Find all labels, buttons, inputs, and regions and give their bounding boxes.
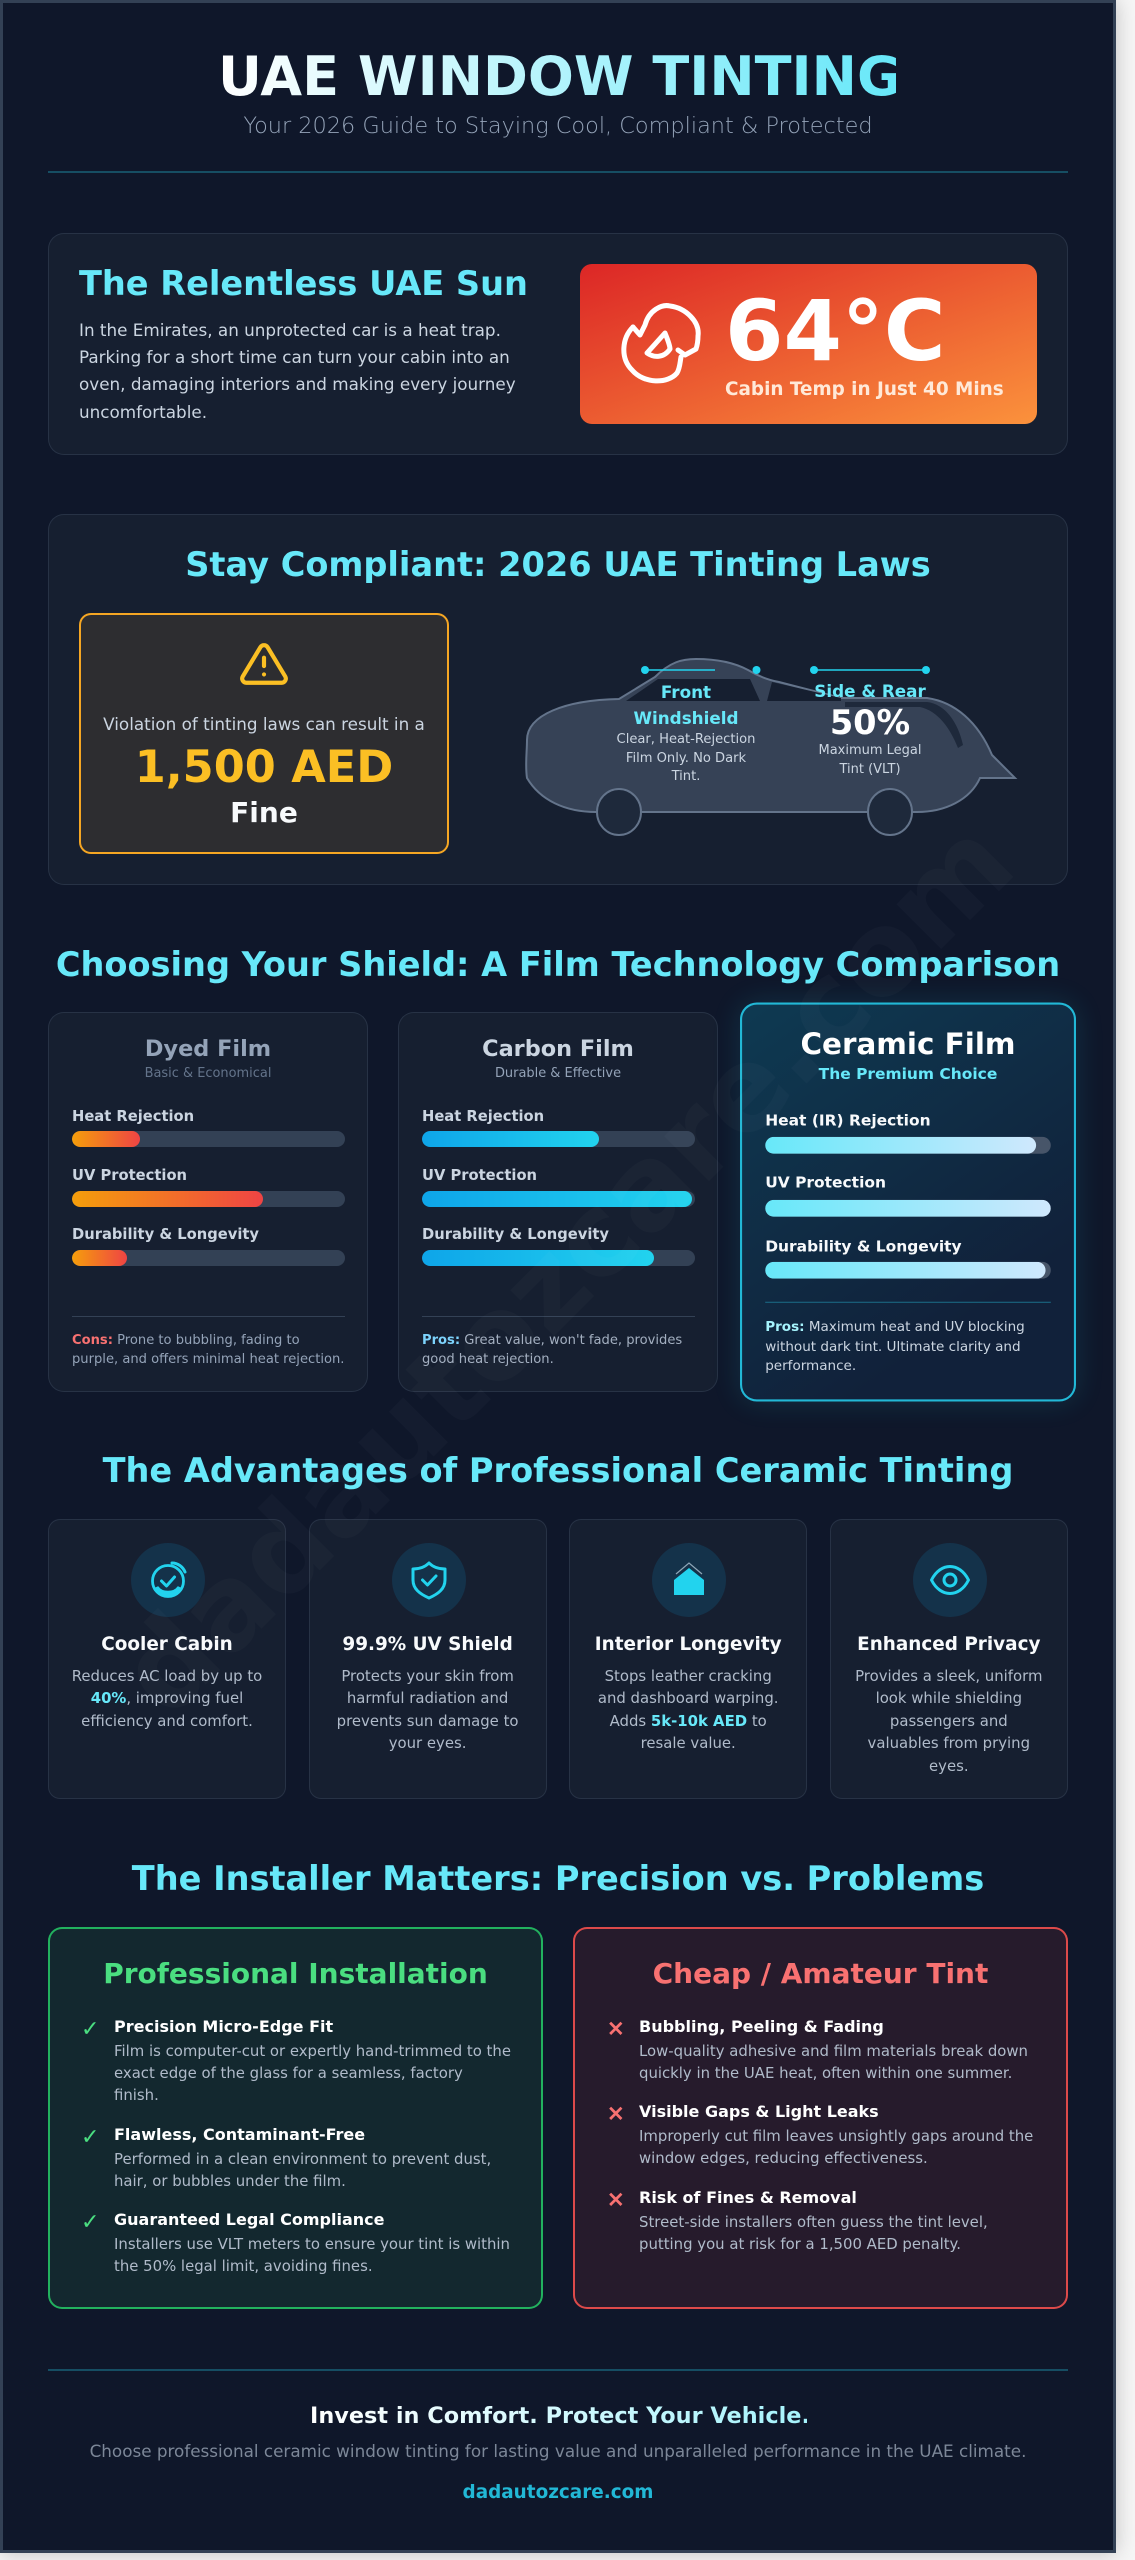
text: violation: Violation of tinting laws can result in a [103,714,425,734]
item: gaps: Visible Gaps & Light Leaks [639,2102,879,2121]
subtitle: dyed film: Basic & Economical [145,1066,271,1081]
wheels [597,789,641,835]
text: front windshield rule [617,732,755,784]
text: sun description [79,320,516,422]
icon: enhanced privacy [913,1543,987,1617]
panel: cooler cabin [48,1519,286,1799]
text: interior longevity [598,1667,779,1752]
label: front windshield: Windshield [633,708,739,728]
metric: heat rejection [765,1112,1051,1154]
text: maximum legal: Tint (VLT) [839,762,901,777]
text: maximum legal: Maximum Legal [818,743,922,758]
item: bubbling [607,2017,1028,2082]
metric: heat rejection: Heat Rejection [422,1108,544,1125]
metric: heat rejection: Heat (IR) Rejection [765,1112,931,1130]
title: dyed film: Dyed Film [145,1036,271,1062]
text: interior longevity: and dashboard warping. [598,1689,779,1707]
text: maximum legal [818,743,922,777]
text: enhanced privacy [855,1667,1042,1775]
text: uv shield: harmful radiation and [347,1689,508,1707]
item: bubbling: quickly in the UAE heat, often within one summer. [639,2064,1012,2082]
text: interior longevity: Stops leather cracking [605,1667,772,1685]
panel: cheap tint [573,1927,1068,2309]
metric: uv protection: UV Protection [765,1174,886,1192]
item: fines: ✕ [607,2188,625,2212]
subtitle: premium choice: The Premium Choice [819,1066,997,1083]
heading: installer: The Installer Matters: Precision vs. Problems [132,1858,984,1898]
label: cabin temp: Cabin Temp in Just 40 Mins [725,379,1004,400]
text: uv shield: prevents sun damage to [337,1712,518,1730]
title: interior longevity: Interior Longevity [595,1634,782,1655]
label: front windshield: Front [661,682,711,702]
text: sun description: In the Emirates, an unprotected car is a heat trap. [79,320,501,340]
car body [526,659,1015,812]
text: sun description: Parking for a short time can turn your cabin into an [79,347,510,367]
text: enhanced privacy: Provides a sleek, uniform [855,1667,1042,1685]
heading: cheap: Cheap / Amateur Tint [653,1957,988,1990]
text: cons: Cons: Prone to bubbling, fading to [72,1333,300,1348]
label: side and rear: Side & Rear [814,681,926,701]
title: ceramic film: Ceramic Film [800,1027,1016,1061]
panel: uv shield [309,1519,547,1799]
item: gaps: window edges, reducing effectiveness. [639,2149,928,2167]
title: enhanced privacy: Enhanced Privacy [857,1634,1040,1655]
text: enhanced privacy: valuables from prying [868,1734,1030,1752]
value: 50 percent: 50% [830,703,910,742]
item: contaminant-free: ✓ [81,2125,99,2150]
metric: uv protection [765,1174,1051,1217]
metric: durability: Durability & Longevity [72,1226,259,1243]
panel: enhanced privacy [830,1519,1068,1799]
footer headline: Invest in Comfort. Protect Your Vehicle. [310,2403,810,2429]
heading: advantages: The Advantages of Professional Ceramic Tinting [103,1450,1013,1490]
text: interior longevity: Adds 5k-10k AED to [610,1712,767,1730]
metric: heat rejection [72,1108,345,1147]
metric: uv protection: UV Protection [72,1167,187,1184]
panel: carbon film [398,1012,718,1392]
value: 64 degrees: 64°C [725,282,946,380]
text: pros: Pros: Maximum heat and UV blocking [765,1320,1025,1335]
text: pros: good heat rejection. [422,1352,554,1367]
item: legal compliance: Guaranteed Legal Compliance [114,2210,384,2229]
item: legal compliance: Installers use VLT meters to ensure your tint is within [114,2235,510,2253]
item: micro-edge fit: ✓ [81,2017,99,2042]
watermark: dadautozcare.com [93,795,1040,1742]
label: fine: Fine [230,796,298,829]
item: fines [607,2188,988,2253]
item: gaps [607,2102,1033,2167]
text: uv shield: Protects your skin from [341,1667,514,1685]
title: cooler cabin: Cooler Cabin [101,1634,233,1655]
icon: uv shield [392,1543,466,1617]
text: sun description: oven, damaging interiors and making every journey [79,374,516,394]
item: micro-edge fit: Film is computer-cut or expertly hand-trimmed to the [114,2042,511,2060]
subtitle: Your 2026 Guide to Staying Cool, Compliant & Protected [243,113,873,139]
text: cons: purple, and offers minimal heat rejection. [72,1352,344,1367]
metric: durability [422,1226,695,1266]
item: fines: Street-side installers often guess the tint level, [639,2213,988,2231]
text: cooler cabin [72,1667,262,1730]
metric: uv protection [72,1167,345,1207]
text: enhanced privacy: passengers and [890,1712,1008,1730]
text: pros: performance. [765,1359,856,1375]
title: carbon film: Carbon Film [482,1036,634,1062]
item: bubbling: Low-quality adhesive and film materials break down [639,2042,1028,2060]
icon: cooler cabin [131,1543,205,1617]
metric: durability: Durability & Longevity [765,1238,962,1256]
item: legal compliance: the 50% legal limit, avoiding fines. [114,2257,373,2275]
text: pros: Pros: Great value, won't fade, provides [422,1333,682,1348]
icon: interior longevity [652,1543,726,1617]
metric: durability [765,1238,1051,1279]
text: pros [765,1320,1025,1375]
metric: durability [72,1226,345,1266]
panel: professional installation [48,1927,543,2309]
panel: relentless sun [48,233,1068,455]
footer text: Choose professional ceramic window tinting for lasting value and unparalleled performance in the UAE climate. [90,2441,1026,2461]
callout: cabin temperature [580,264,1037,424]
windows [626,679,760,701]
text: front windshield rule: Tint. [672,769,700,784]
item: bubbling: ✕ [607,2017,625,2041]
measure lines [645,669,926,671]
text: cooler cabin: 40%, improving fuel [91,1689,243,1707]
text: interior longevity: resale value. [641,1734,736,1752]
footer link: dadautozcare.com [463,2482,653,2503]
heading: relentless sun: The Relentless UAE Sun [79,264,528,302]
text: sun description: uncomfortable. [79,402,207,422]
panel: tinting laws [48,514,1068,885]
metric: heat rejection [422,1108,695,1147]
title: UAE WINDOW TINTING [218,45,901,108]
value: fine amount: 1,500 AED [135,741,393,793]
item: micro-edge fit: exact edge of the glass for a seamless, factory [114,2064,463,2082]
heading: tinting laws: Stay Compliant: 2026 UAE Tinting Laws [185,544,931,584]
item: gaps: ✕ [607,2102,625,2126]
text: front windshield rule: Clear, Heat-Rejection [617,732,755,747]
item: micro-edge fit: finish. [114,2086,159,2104]
item: contaminant-free [81,2125,491,2190]
item: legal compliance [81,2210,510,2275]
callout: fine [79,613,449,854]
icon: warning triangle [240,643,288,685]
item: fines: putting you at risk for a 1,500 AED penalty. [639,2235,961,2253]
panel: ceramic film [740,1002,1076,1402]
text: pros [422,1333,682,1367]
metric: uv protection [422,1167,695,1207]
heading: comparison: Choosing Your Shield: A Film Technology Comparison [56,944,1060,984]
text: cooler cabin: efficiency and comfort. [81,1712,253,1730]
chart: car diagram [525,658,1018,836]
item: contaminant-free: hair, or bubbles under the film. [114,2172,346,2190]
icon: heat swirl [621,303,701,384]
item: bubbling: Bubbling, Peeling & Fading [639,2017,884,2036]
text: cons [72,1333,344,1367]
heading: professional: Professional Installation [103,1957,488,1990]
panel: interior longevity [569,1519,807,1799]
metric: uv protection: UV Protection [422,1167,537,1184]
item: contaminant-free: Performed in a clean environment to prevent dust, [114,2150,491,2168]
item: legal compliance: ✓ [81,2210,99,2235]
item: micro-edge fit [81,2017,511,2104]
text: enhanced privacy: look while shielding [876,1689,1022,1707]
text: uv shield [337,1667,518,1752]
text: pros: without dark tint. Ultimate clarity and [765,1339,1021,1355]
metric: heat rejection: Heat Rejection [72,1108,194,1125]
metric: durability: Durability & Longevity [422,1226,609,1243]
panel: dyed film [48,1012,368,1392]
label: front windshield [633,682,739,728]
item: micro-edge fit: Precision Micro-Edge Fit [114,2017,333,2036]
title: uv shield: 99.9% UV Shield [342,1634,513,1655]
text: front windshield rule: Film Only. No Dark [626,751,746,766]
item: gaps: Improperly cut film leaves unsightly gaps around the [639,2127,1033,2145]
text: cooler cabin: Reduces AC load by up to [72,1667,262,1685]
text: uv shield: your eyes. [389,1734,466,1752]
item: contaminant-free: Flawless, Contaminant-Free [114,2125,365,2144]
subtitle: carbon film: Durable & Effective [495,1066,621,1081]
text: enhanced privacy: eyes. [929,1757,969,1775]
item: fines: Risk of Fines & Removal [639,2188,857,2207]
